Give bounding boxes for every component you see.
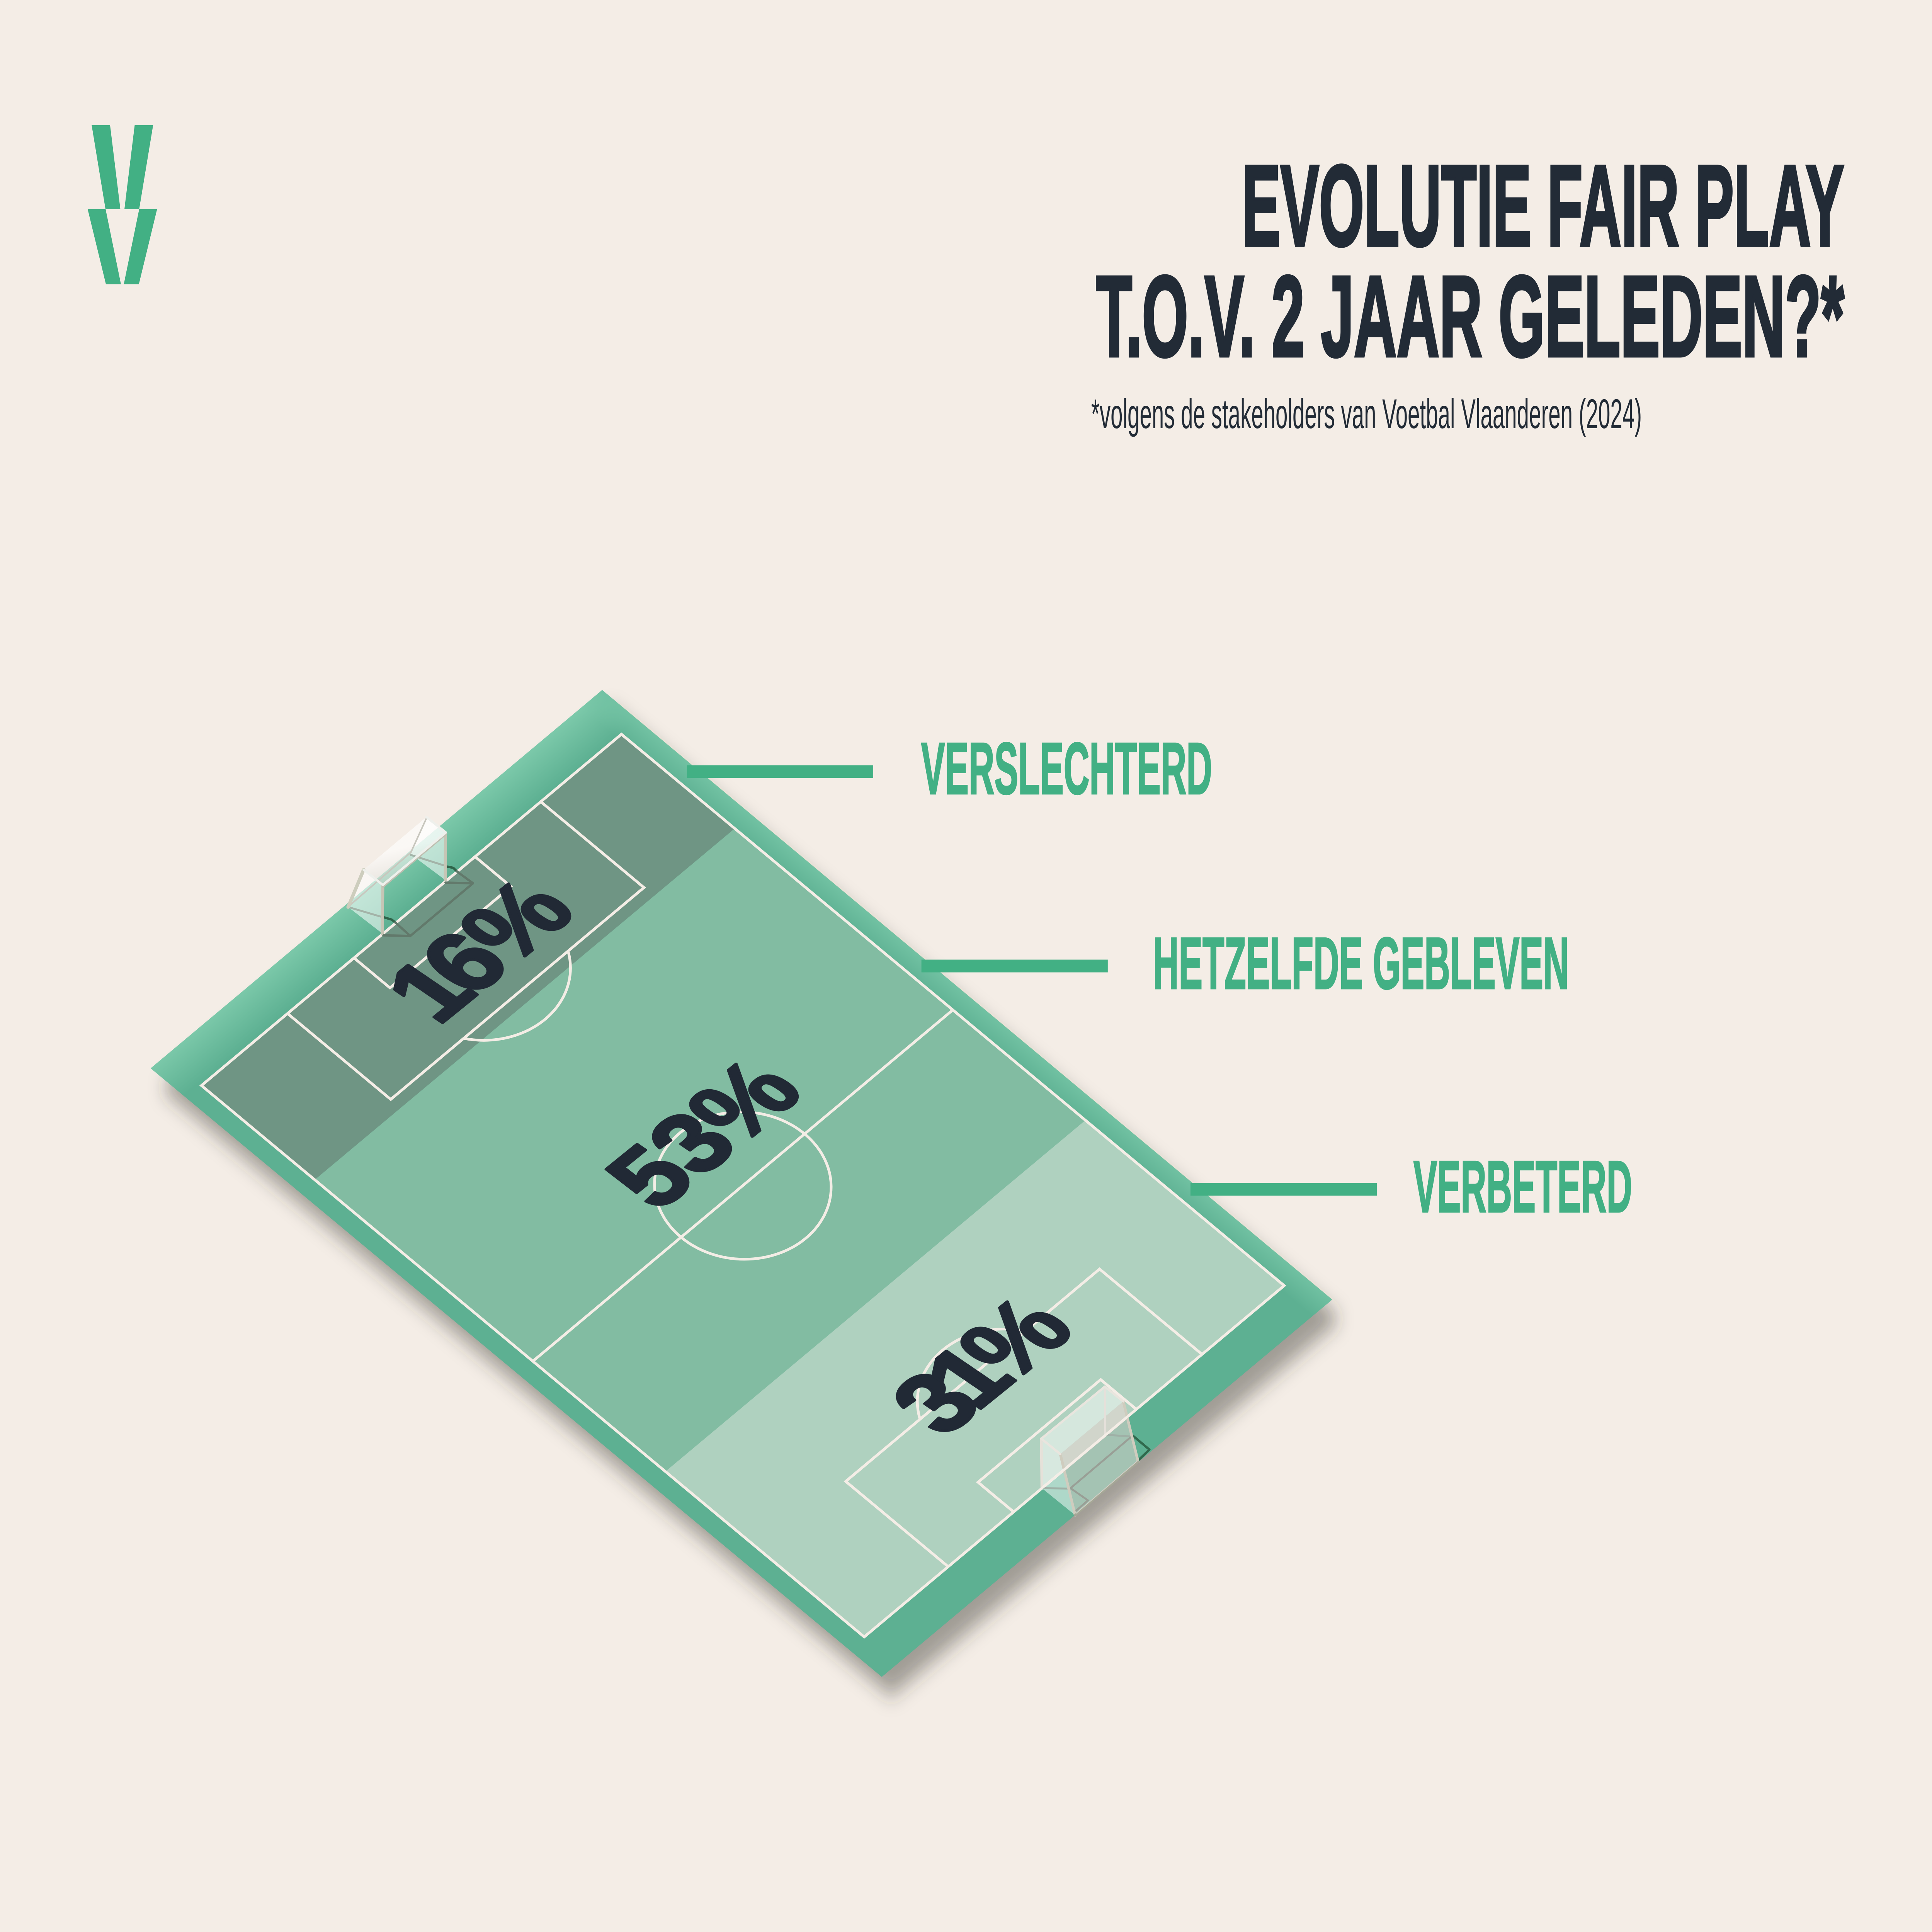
title: [1096, 141, 1844, 381]
subtitle: *volgens de stakeholders van Voetbal Vlaanderen (2024): [1091, 390, 1642, 437]
percentage: 53%: %: [665, 1042, 824, 1159]
percentage: 16%: %: [437, 861, 597, 979]
label: verbeterd: VERBETERD: [1413, 1145, 1632, 1228]
goal frame: [1041, 1387, 1138, 1515]
goal: top: [348, 817, 473, 936]
pitch surround: [151, 690, 1332, 1677]
zone: verbeterd: [665, 1120, 1284, 1637]
pitch shadow: [160, 709, 1342, 1696]
goal shadow: [383, 867, 473, 936]
zone: hetzelfde gebleven: [315, 828, 1085, 1471]
percentage: 16%: 1: [363, 942, 497, 1039]
percentage: 16%: 6: [397, 914, 532, 1011]
percentage: 31%: 1: [901, 1328, 1036, 1425]
connector: verbeterd: [1190, 1183, 1377, 1196]
percentage: 31%: 3: [868, 1354, 1003, 1451]
goal net panels: [348, 817, 446, 934]
zone: verslechterd: [201, 734, 735, 1180]
connector: verslechterd: [687, 765, 873, 778]
percentage: 53%: 5: [583, 1128, 718, 1225]
pitch zones and markings: [201, 734, 1284, 1637]
label: verslechterd: VERSLECHTERD: [921, 727, 1212, 810]
goal line: bottom: [864, 1285, 1284, 1637]
goal frame: [348, 817, 446, 934]
goal net panels: [1041, 1387, 1138, 1515]
label: hetzelfde gebleven: HETZELFDE GEBLEVEN: [1153, 922, 1569, 1004]
pitch: [151, 690, 1342, 1696]
percentage: 53%: 3: [624, 1094, 759, 1191]
logo: [88, 125, 157, 284]
connector: hetzelfde gebleven: [922, 960, 1108, 972]
percentage: 31%: %: [936, 1279, 1095, 1397]
goal shadow: [1133, 1435, 1150, 1460]
goal: bottom: [1041, 1387, 1150, 1515]
pitch lines: [201, 734, 1284, 1637]
